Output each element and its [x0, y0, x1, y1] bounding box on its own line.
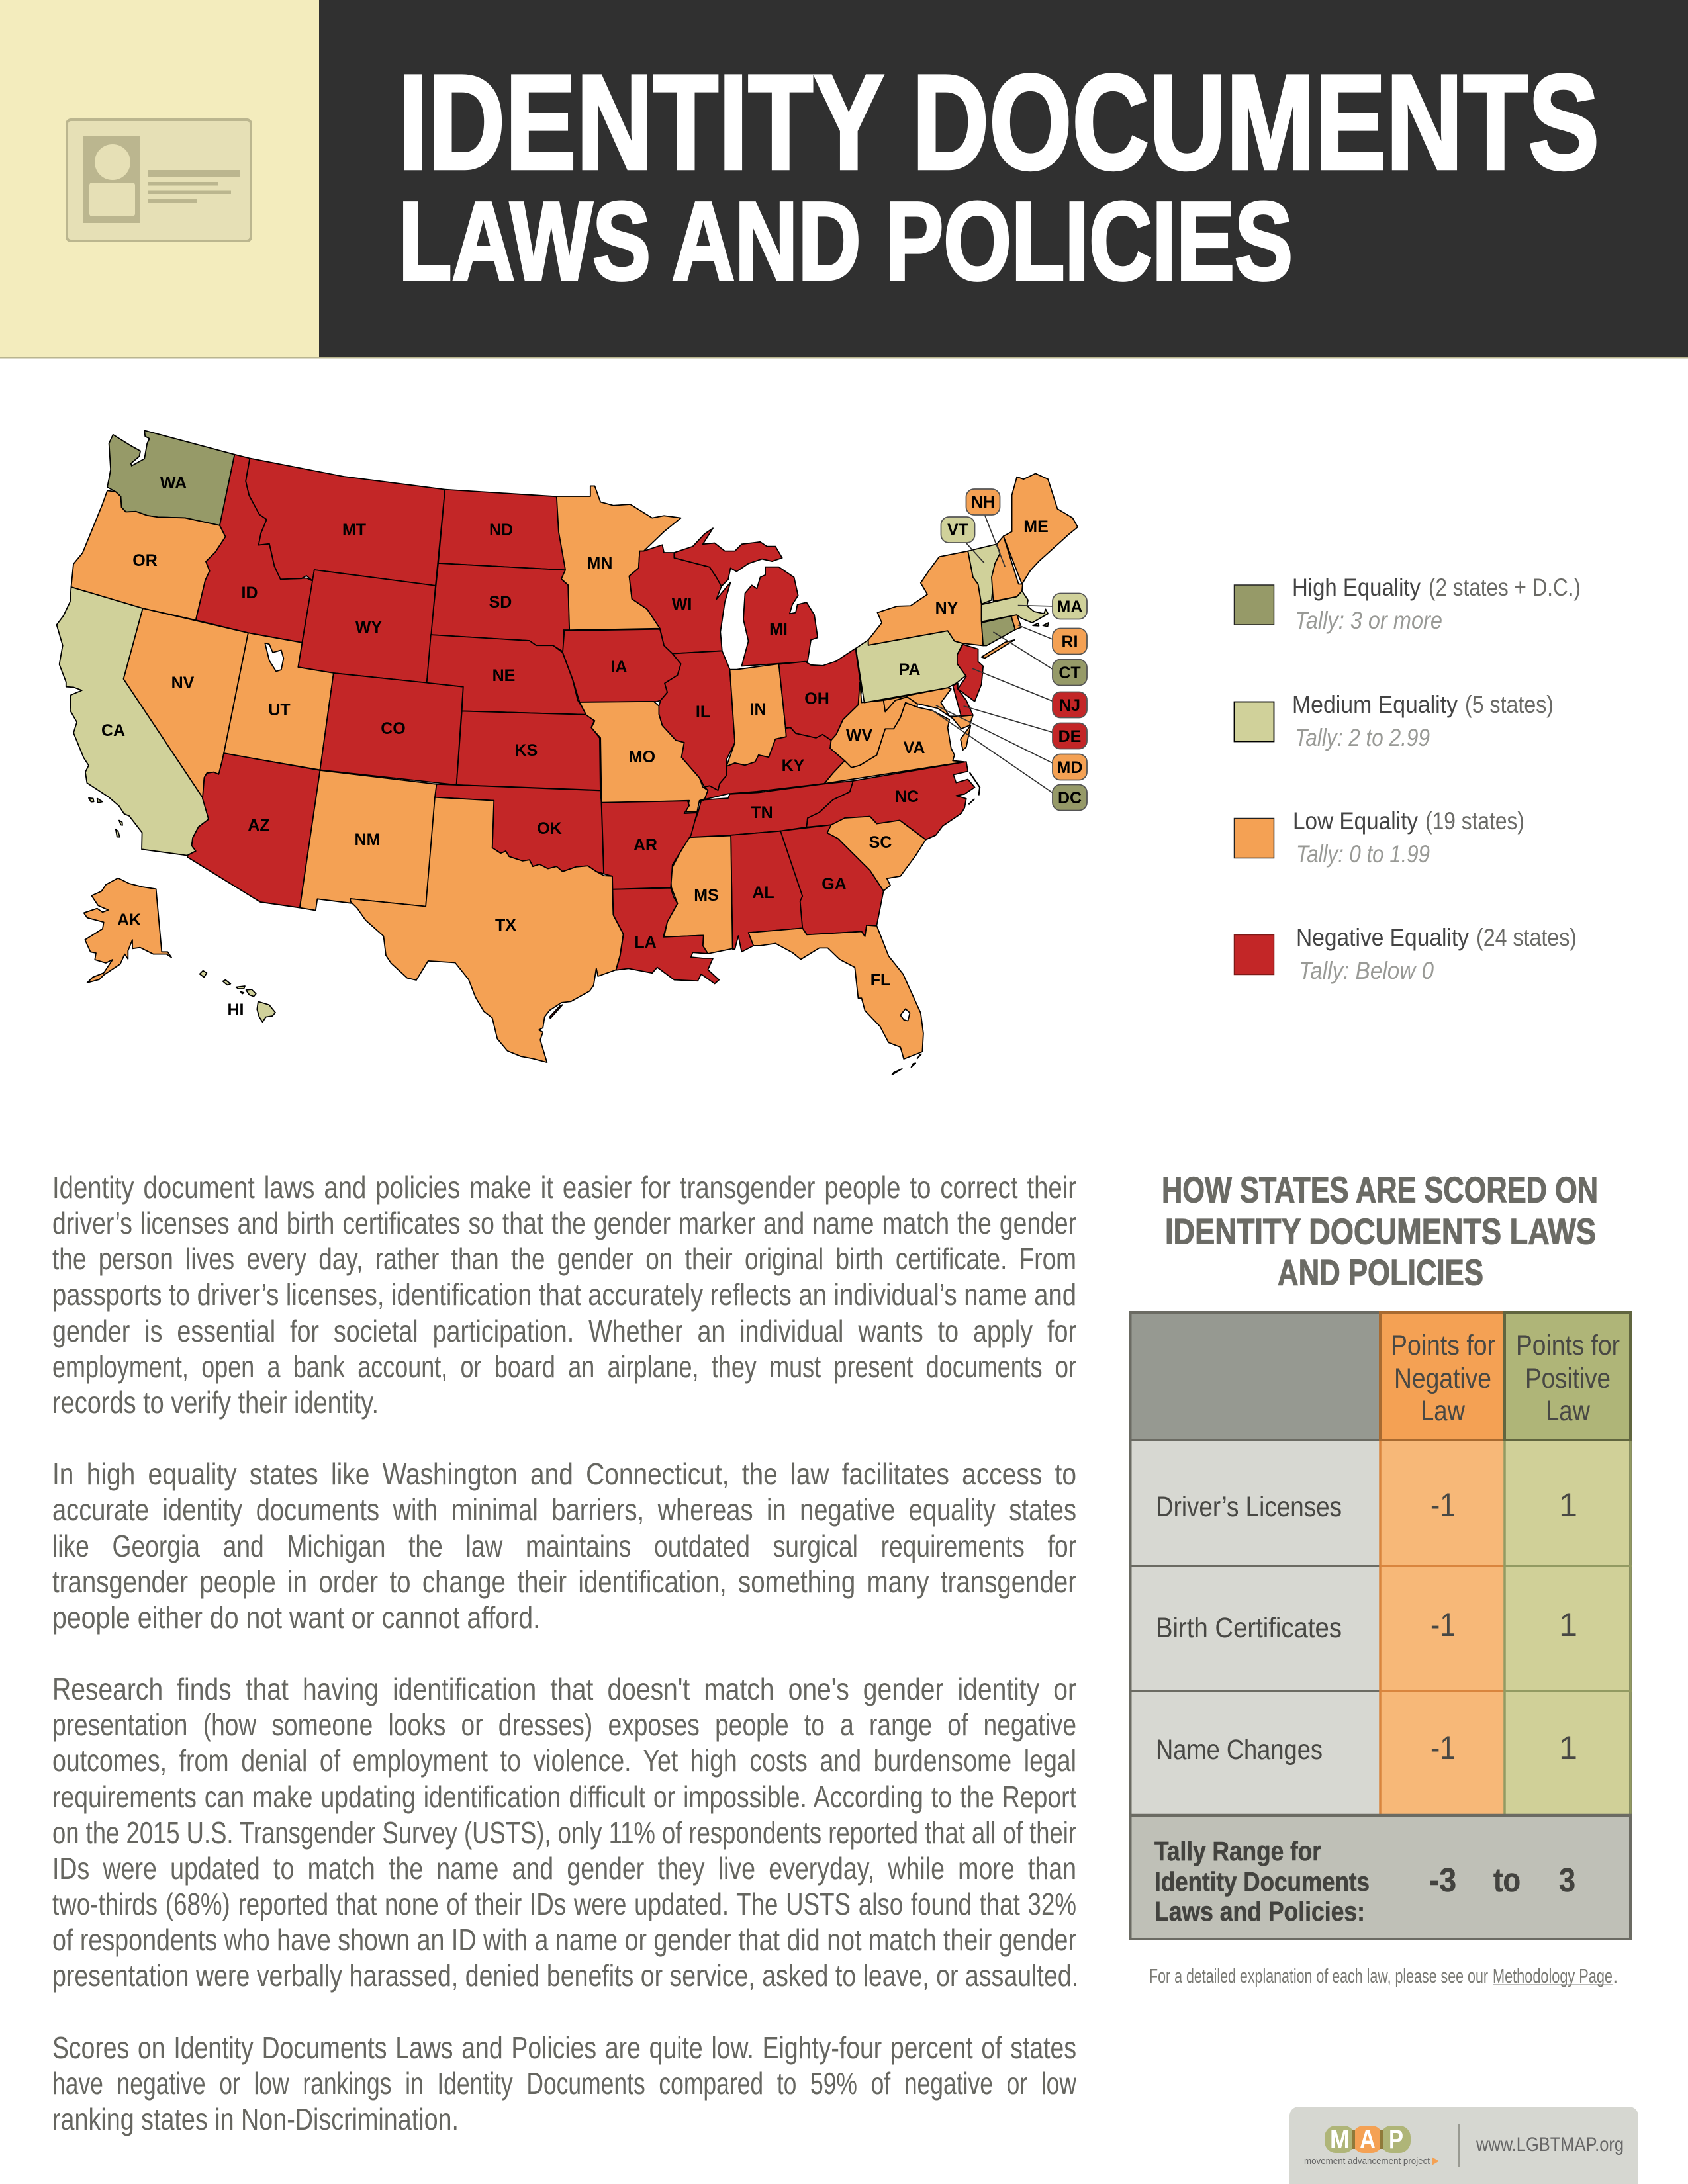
state: RI [1011, 615, 1021, 629]
paragraph 1: driver’s licenses and birth certificates so that the gender marker and name match the gender [52, 1206, 1076, 1240]
footnote: Methodology Page [1493, 1964, 1613, 1987]
row: birth certificates: Birth Certificates [1156, 1612, 1342, 1644]
state: LA [613, 888, 719, 983]
state: VT [968, 544, 1000, 604]
legend item: low equality: Low Equality [1293, 807, 1418, 835]
state: AL [731, 831, 802, 952]
row: tally range: 3 [1559, 1861, 1575, 1899]
badge: RI: RI [1062, 633, 1078, 651]
row: driver's licenses: -1 [1430, 1486, 1456, 1524]
paragraph 3: outcomes, from denial of employment to violence. Yet high costs and burdensome legal [52, 1743, 1076, 1778]
legend [1234, 574, 1581, 984]
state: SC: SC [869, 833, 892, 852]
state: MS: MS [694, 886, 719, 905]
state: KS [457, 711, 600, 790]
row: birth certificates: -1 [1430, 1606, 1456, 1643]
paragraph 3: Research finds that having identification that doesn't match one's gender identity or [52, 1672, 1076, 1706]
body text [52, 1170, 1078, 2136]
state: MN [557, 486, 681, 630]
badge: MD [1053, 754, 1087, 780]
column header: negative law: Negative [1394, 1363, 1491, 1394]
badge: NJ: NJ [1059, 696, 1080, 715]
scoring heading: IDENTITY DOCUMENTS LAWS [1165, 1211, 1596, 1252]
state: MT: MT [342, 521, 366, 539]
paragraph 1: the person lives every day, rather than the gender on their original birth certificate. From [52, 1242, 1076, 1276]
state: ME [1004, 473, 1078, 584]
paragraph 3 [52, 1672, 1078, 1993]
legend item: low equality: Tally: 0 to 1.99 [1296, 841, 1430, 868]
state: SD: SD [489, 593, 512, 612]
state: PA [856, 631, 968, 703]
state: IN: IN [749, 700, 767, 719]
state: NM: NM [355, 831, 380, 849]
badge: VT: VT [947, 521, 968, 539]
column header: positive law: Positive [1525, 1363, 1611, 1394]
state: KY [704, 728, 845, 799]
column header: positive law: Points for [1516, 1330, 1620, 1361]
paragraph 2: In high equality states like Washington and Connecticut, the law facilitates access to [52, 1457, 1076, 1491]
state: CA: CA [101, 721, 125, 740]
state: ID [196, 455, 312, 643]
state: TN [688, 781, 853, 837]
state: UT: UT [268, 701, 291, 719]
logo: MAP [1304, 2125, 1439, 2167]
paragraph 1: passports to driver’s licenses, identification that accurately reflects an individual’s name and [52, 1277, 1076, 1312]
state: WV [830, 682, 917, 768]
state: ND: ND [489, 521, 513, 539]
badge: CT: CT [1058, 664, 1081, 682]
map of US states [57, 430, 1087, 1075]
paragraph 2: accurate identity documents with minimal barriers, whereas in negative equality states [52, 1492, 1076, 1527]
legend item: high equality [1234, 574, 1581, 634]
badge: NH: NH [971, 493, 995, 512]
state: IL: IL [696, 703, 710, 721]
row: tally range: -3 [1429, 1861, 1456, 1899]
scoring heading [1162, 1170, 1598, 1293]
logo: MAP: P [1389, 2125, 1403, 2154]
legend item: medium equality [1234, 691, 1554, 751]
state: IN [726, 664, 786, 766]
paragraph 2: transgender people in order to change their identification, something many transgender [52, 1565, 1076, 1599]
paragraph 2: like Georgia and Michigan the law maintains outdated surgical requirements for [52, 1529, 1076, 1563]
paragraph 3: of respondents who have shown an ID with a name or gender that did not match their gender [52, 1923, 1076, 1957]
row: driver's licenses: Driver’s Licenses [1156, 1491, 1342, 1523]
state: OH: OH [804, 690, 829, 708]
paragraph 4: have negative or low rankings in Identity Documents compared to 59% of negative or low [52, 2066, 1077, 2101]
logo: MAP: movement advancement project [1304, 2156, 1430, 2167]
badge: DC [1053, 785, 1087, 810]
icon: identity card [67, 120, 251, 241]
legend item: high equality: (2 states + D.C.) [1429, 574, 1581, 601]
state: FL [749, 925, 923, 1075]
column header: negative law [1380, 1312, 1505, 1440]
state: ME: ME [1023, 518, 1049, 536]
leader lines to small states [931, 516, 1053, 793]
badge: DC: DC [1058, 789, 1082, 807]
state: ID: ID [241, 584, 258, 602]
state: NV: NV [171, 674, 195, 692]
state: MO: MO [629, 748, 655, 766]
paragraph 1 [52, 1170, 1076, 1420]
state: OK [435, 784, 604, 874]
legend item: low equality: (19 states) [1425, 807, 1524, 835]
scoring table [1129, 1311, 1632, 1940]
legend item: high equality: Tally: 3 or more [1295, 607, 1442, 634]
paragraph 4: ranking states in Non-Discrimination. [52, 2102, 459, 2136]
state: MT [246, 458, 445, 586]
state: DE [953, 683, 973, 716]
state: TX: TX [495, 916, 516, 934]
state: OR [71, 490, 226, 620]
state: MO [580, 702, 708, 812]
row: driver's licenses: 1 [1559, 1486, 1577, 1524]
row: name changes: 1 [1559, 1729, 1577, 1766]
legend item: negative equality: (24 states) [1476, 924, 1577, 951]
state: NC: NC [895, 788, 919, 806]
website: www.LGBTMAP.org [1476, 2134, 1624, 2156]
state: WA [107, 430, 234, 525]
paragraph 3: presentation were verbally harassed, denied benefits or service, asked to leave, or assaulted. [52, 1958, 1078, 1993]
state: LA: LA [634, 933, 657, 952]
legend item: medium equality: Medium Equality [1292, 691, 1458, 718]
badge: DE: DE [1058, 727, 1081, 746]
legend item: low equality [1234, 807, 1524, 868]
state: NJ [957, 645, 983, 702]
state: CA [57, 587, 209, 856]
state: AL: AL [752, 884, 774, 902]
badge: DE [1053, 723, 1087, 749]
state: KS: KS [515, 741, 538, 760]
badge: MA: MA [1057, 598, 1082, 616]
state: KY: KY [782, 756, 805, 775]
paragraph 1: employment, open a bank account, or board an airplane, they must present documents or [52, 1349, 1076, 1384]
state: MN: MN [587, 554, 612, 572]
badge: RI [1053, 629, 1087, 654]
state: VA: VA [904, 739, 925, 757]
row: name changes: -1 [1430, 1729, 1456, 1766]
state: HI: HI [228, 1001, 244, 1019]
state: TN: TN [751, 803, 773, 822]
paragraph 2 [52, 1457, 1076, 1635]
state: NY: NY [935, 599, 959, 617]
state: SC [827, 817, 925, 891]
logo: MAP: M [1330, 2125, 1350, 2154]
state: SD [431, 563, 569, 651]
state: CO: CO [381, 719, 406, 738]
state: WI [630, 545, 731, 654]
state: OR: OR [132, 551, 158, 570]
legend item: negative equality [1234, 924, 1577, 984]
footer panel [1289, 2107, 1638, 2184]
badge: MD: MD [1057, 758, 1082, 777]
state: MD [884, 688, 973, 729]
badge: MA [1053, 593, 1087, 619]
state: VA [824, 703, 970, 784]
badge: VT [941, 517, 974, 543]
state: NC [806, 762, 980, 840]
state: ND [438, 490, 565, 570]
state: NM [300, 770, 436, 911]
badge: NJ [1053, 692, 1087, 717]
state: AZ [187, 753, 320, 908]
state: AK: AK [117, 911, 141, 929]
paragraph 4 [52, 2030, 1077, 2136]
row: name changes: Name Changes [1156, 1734, 1323, 1766]
state: FL: FL [870, 971, 890, 989]
title [399, 47, 1599, 303]
state: PA: PA [899, 660, 920, 679]
state: WY [298, 570, 436, 683]
state: WA: WA [160, 474, 187, 492]
paragraph 1: Identity document laws and policies make it easier for transgender people to correct their [52, 1170, 1076, 1205]
paragraph 3: on the 2015 U.S. Transgender Survey (USTS), only 11% of respondents reported that all of their [52, 1815, 1076, 1850]
state: WV: WV [846, 726, 872, 745]
state: AR [602, 801, 697, 889]
column header: positive law [1505, 1312, 1630, 1440]
state: NE [427, 635, 586, 715]
legend item: medium equality: Tally: 2 to 2.99 [1295, 724, 1430, 751]
row: tally range [1154, 1836, 1575, 1927]
state: IL [659, 651, 735, 790]
column header: negative law: Law [1421, 1395, 1466, 1427]
paragraph 4: Scores on Identity Documents Laws and Policies are quite low. Eighty-four percent of states [52, 2030, 1076, 2065]
state: TX [350, 797, 624, 1062]
state: IA: IA [610, 658, 628, 676]
row: tally range: Laws and Policies: [1154, 1896, 1365, 1927]
legend item: negative equality: Negative Equality [1296, 924, 1469, 951]
scoring heading: AND POLICIES [1278, 1252, 1483, 1293]
state: MA [982, 591, 1049, 627]
row: name changes [1156, 1729, 1577, 1766]
state: MI: MI [769, 620, 788, 639]
logo: MAP: A [1360, 2125, 1376, 2154]
title: LAWS AND POLICIES [399, 179, 1293, 303]
paragraph 3: two-thirds (68%) reported that none of their IDs were updated. The USTS also found that 32% [52, 1887, 1076, 1921]
paragraph 1: records to verify their identity. [52, 1385, 379, 1420]
state: UT [224, 633, 334, 770]
state: NH [992, 536, 1023, 601]
state: CT [982, 616, 1015, 646]
column header: negative law: Points for [1391, 1330, 1495, 1361]
paragraph 3: IDs were updated to match the name and gender they live everyday, while more than [52, 1851, 1076, 1886]
row: driver's licenses [1156, 1486, 1577, 1524]
header band [0, 0, 1688, 359]
legend item: medium equality: (5 states) [1465, 691, 1554, 718]
state: OK: OK [537, 819, 562, 838]
state: OH [779, 649, 862, 740]
paragraph 3: presentation (how someone looks or dresses) exposes people to a range of negative [52, 1707, 1076, 1742]
row: tally range: to [1493, 1861, 1521, 1899]
footnote: For a detailed explanation of each law, please see our [1149, 1964, 1488, 1987]
badge: NH [966, 489, 1000, 515]
state: NY [868, 551, 1015, 658]
state: MI [674, 528, 818, 666]
legend item: high equality: High Equality [1292, 574, 1421, 601]
row: tally range: Identity Documents [1154, 1866, 1370, 1897]
row: birth certificates: 1 [1559, 1606, 1577, 1643]
state: AK [84, 878, 171, 983]
legend item: negative equality: Tally: Below 0 [1299, 957, 1434, 984]
state: AR: AR [633, 836, 657, 854]
footnote: . [1613, 1964, 1618, 1987]
state: AZ: AZ [248, 816, 270, 835]
row: tally range: Tally Range for [1154, 1836, 1321, 1866]
column header: positive law: Law [1546, 1395, 1591, 1427]
state: WY: WY [355, 618, 382, 637]
row: birth certificates [1156, 1606, 1577, 1644]
state: NE: NE [492, 666, 515, 685]
paragraph 3: requirements can make updating identification difficult or impossible. According to the Report [52, 1780, 1076, 1814]
state: HI [200, 971, 275, 1022]
state: CO [320, 673, 463, 785]
state: GA: GA [821, 875, 847, 893]
state: MS [664, 836, 733, 954]
paragraph 1: gender is essential for societal participation. Whether an individual wants to apply for [52, 1314, 1076, 1348]
state: NV [124, 608, 248, 798]
paragraph 2: people either do not want or cannot afford. [52, 1600, 540, 1635]
badge: CT [1053, 659, 1087, 686]
state: WI: WI [672, 595, 692, 614]
state: GA [780, 825, 884, 936]
state: IA [563, 629, 681, 702]
